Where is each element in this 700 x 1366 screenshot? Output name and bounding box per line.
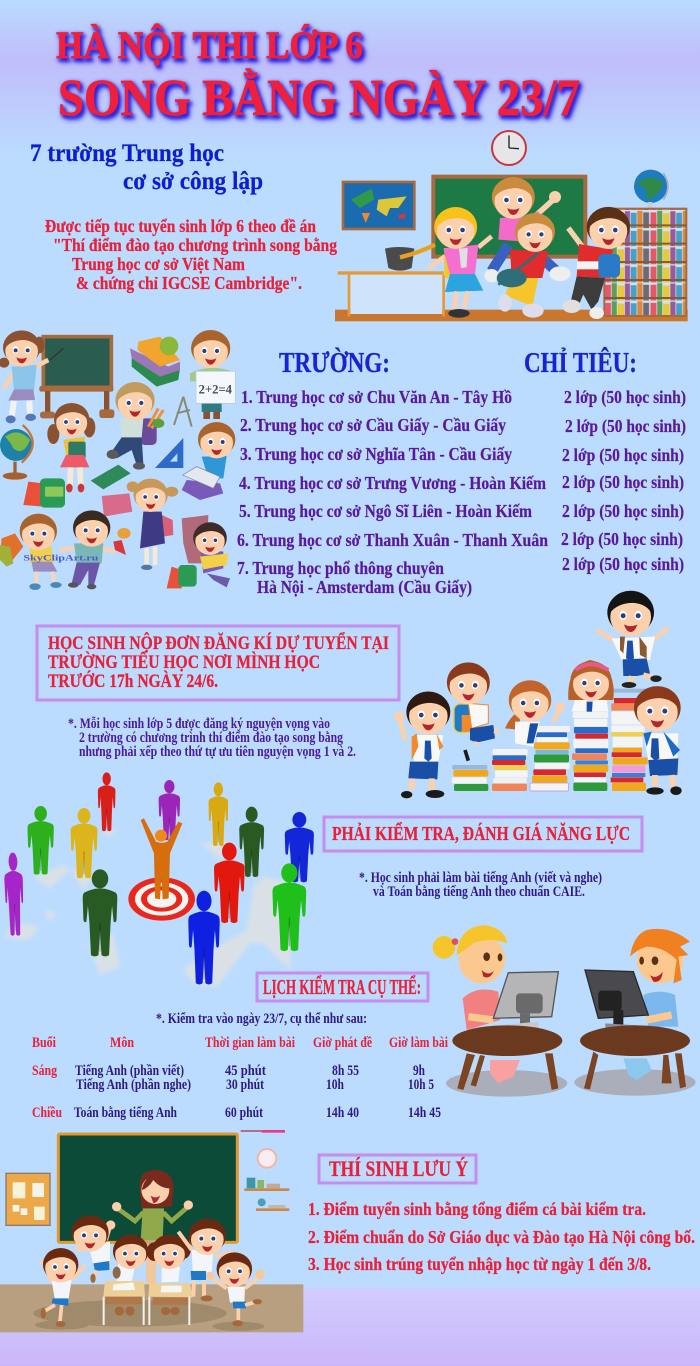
title — [56, 22, 580, 127]
list of schools: 4. Trung học cơ sở Trưng Vương - Hoàn Kiếm — [239, 473, 546, 493]
subtitle — [30, 140, 263, 195]
title: SONG BẰNG NGÀY 23/7 — [58, 67, 580, 127]
note: test subjects: và Toán bằng tiếng Anh theo chuẩn CAIE. — [373, 884, 585, 900]
illustration: classroom with four children — [335, 131, 688, 321]
set square — [155, 438, 183, 468]
globe — [0, 425, 33, 480]
callout: application deadline — [37, 626, 399, 700]
callout: application deadline: TRƯỜNG TIỂU HỌC NƠI MÌNH HỌC — [48, 651, 320, 673]
stack of books and apple — [130, 337, 180, 387]
figure: green left — [27, 806, 54, 875]
pupil: seated girl — [147, 1235, 191, 1282]
blackboard on stand — [39, 337, 114, 418]
wall shelves — [241, 1130, 289, 1211]
quota per school: 2 lớp (50 học sinh) — [565, 416, 686, 436]
title: HÀ NỘI THI LỚP 6 — [56, 22, 363, 67]
quota per school — [561, 387, 686, 574]
boy with math sign: 2+2=4 — [199, 382, 233, 396]
crayon box — [91, 465, 131, 489]
girl at computer — [433, 925, 558, 1083]
figure: yellow right — [209, 782, 228, 846]
wall clock — [258, 1149, 276, 1168]
jumping boy with backpack — [447, 662, 498, 761]
illustration: people standing around target — [3, 772, 314, 987]
subtitle: cơ sở công lập — [123, 168, 263, 195]
pupil desks — [103, 1281, 193, 1325]
list of schools — [237, 387, 548, 597]
round table right — [580, 1025, 690, 1089]
child: boy in front — [497, 213, 555, 318]
quota per school: 2 lớp (50 học sinh) — [564, 387, 686, 407]
child: blonde girl — [400, 207, 492, 318]
callout: application deadline: HỌC SINH NỘP ĐƠN ĐĂNG KÍ DỰ TUYỂN TẠI — [48, 632, 389, 654]
callout: application deadline: TRƯỚC 17h NGÀY 24/6. — [48, 670, 218, 692]
quota per school: 2 lớp (50 học sinh) — [562, 472, 684, 492]
girl with headband — [568, 660, 614, 712]
list of schools: 2. Trung học cơ sở Cầu Giấy - Cầu Giấy — [240, 415, 506, 435]
girl with pink strap — [505, 680, 565, 747]
illustration: two children at computers — [433, 925, 696, 1097]
intro text block: Trung học cơ sở Việt Nam — [72, 254, 245, 274]
round table left — [452, 1025, 562, 1090]
list of notes — [308, 1199, 695, 1274]
schedule table — [32, 1035, 448, 1121]
callout: must take assessment — [324, 817, 642, 851]
row: morning writing — [32, 1063, 425, 1079]
row: afternoon maths — [32, 1105, 441, 1121]
figure: red front — [214, 843, 245, 923]
quota per school: 2 lớp (50 học sinh) — [562, 445, 684, 465]
child: boy on top — [484, 177, 571, 282]
pupil: jumping left — [71, 1215, 115, 1283]
list of schools: 5. Trung học cơ sở Ngô Sĩ Liên - Hoàn Kiếm — [239, 501, 532, 521]
pupil: standing boy — [178, 1219, 233, 1301]
test date note: *. Kiểm tra vào ngày 23/7, cụ thể như sau: — [156, 1011, 367, 1027]
figure: red small — [98, 772, 115, 831]
figure: blue front — [188, 891, 220, 984]
boy at computer — [585, 929, 690, 1080]
teacher — [112, 1170, 193, 1284]
intro text block: Được tiếp tục tuyển sinh lớp 6 theo đề án — [45, 216, 316, 236]
quota per school: 2 lớp (50 học sinh) — [562, 501, 684, 521]
backpack — [23, 478, 65, 508]
callout: candidates note heading: THÍ SINH LƯU Ý — [329, 1156, 468, 1181]
illustration: collection of school children and supplies — [0, 330, 235, 590]
figure: purple rear — [159, 780, 180, 840]
watermark: SkyClipArt.ru — [23, 553, 99, 563]
chalkboard — [58, 1134, 237, 1242]
row: morning listening: Tiếng Anh (phần nghe) — [76, 1077, 191, 1093]
row: afternoon maths: 60 phút — [225, 1105, 263, 1121]
table header row: Buổi — [32, 1035, 56, 1051]
note: test subjects: *. Học sinh phải làm bài tiếng Anh (viết và nghe) — [359, 870, 602, 886]
row: morning listening — [76, 1077, 434, 1093]
girl with pink backpack — [127, 479, 178, 570]
row: morning writing: Tiếng Anh (phần viết) — [75, 1063, 184, 1079]
small backpack — [167, 565, 197, 588]
girl with pigtails — [47, 403, 95, 492]
figure: dark green right — [239, 807, 264, 877]
row: afternoon maths: 14h 45 — [408, 1105, 441, 1121]
notebook — [102, 493, 132, 517]
pupil: seated boy — [113, 1235, 148, 1282]
row: morning writing: 9h — [413, 1063, 425, 1079]
note: two preferences: nhưng phải xếp theo thứ tự ưu tiên nguyện vọng 1 và 2. — [79, 744, 356, 760]
note: two preferences: 2 trường có chương trình thí điểm đào tạo song bằng — [79, 730, 344, 746]
figure: yellow left — [71, 808, 97, 878]
boy with math sign — [190, 330, 235, 419]
child: curly-haired boy — [562, 207, 630, 319]
callout: schedule heading: LỊCH KIỂM TRA CỤ THỂ: — [263, 975, 421, 999]
list of notes: 3. Học sinh trúng tuyển nhập học từ ngày 1 đến 3/8. — [308, 1254, 651, 1274]
target — [128, 877, 195, 921]
table heading: quota: CHỈ TIÊU: — [524, 346, 637, 379]
list of notes: 1. Điểm tuyển sinh bằng tổng điểm cá bài kiểm tra. — [308, 1199, 646, 1219]
book stacks — [452, 689, 648, 791]
table header row — [32, 1035, 448, 1051]
row: morning listening: 10h — [326, 1077, 344, 1093]
note: two preferences — [68, 716, 356, 760]
row: morning listening: 10h 5 — [408, 1077, 434, 1093]
figure: blue right — [285, 812, 314, 882]
boy holding flowers — [60, 510, 131, 589]
smiling boy left — [394, 691, 450, 798]
subtitle: 7 trường Trung học — [30, 140, 224, 167]
row: morning writing: 45 phút — [225, 1063, 266, 1079]
figure: dark green front — [83, 869, 117, 956]
quota per school: 2 lớp (50 học sinh) — [561, 529, 683, 549]
list of schools: 1. Trung học cơ sở Chu Văn An - Tây Hồ — [241, 387, 512, 407]
girl with headband — [0, 514, 62, 590]
row: morning writing: 8h 55 — [332, 1063, 359, 1079]
illustration: children on stacks of books — [394, 591, 682, 798]
table header row: Thời gian làm bài — [205, 1035, 295, 1051]
list of schools: Hà Nội - Amsterdam (Cầu Giấy) — [257, 577, 472, 597]
cork board — [6, 1173, 50, 1225]
callout: schedule heading — [257, 973, 428, 1001]
pupil: far left — [41, 1248, 85, 1327]
intro text block: & chứng chỉ IGCSE Cambridge". — [76, 273, 302, 293]
row: afternoon maths: Chiều — [32, 1105, 62, 1121]
teacher girl — [0, 330, 63, 423]
boy on right — [634, 686, 682, 795]
row: morning writing: Sáng — [32, 1063, 58, 1079]
list of schools: 6. Trung học cơ sở Thanh Xuân - Thanh Xuân — [237, 530, 548, 550]
note: test subjects — [359, 870, 602, 900]
girl reading beside book stack — [182, 515, 230, 587]
figure: purple left — [3, 853, 25, 936]
row: afternoon maths: 14h 40 — [326, 1105, 359, 1121]
illustration: teacher and pupils in classroom — [0, 1130, 303, 1332]
table header row: Giờ phát đề — [313, 1035, 372, 1051]
intro text block: "Thí điểm đào tạo chương trình song bằng — [53, 235, 337, 255]
row: morning listening: 30 phút — [226, 1077, 264, 1093]
list of schools: 3. Trung học cơ sở Nghĩa Tân - Cầu Giấy — [240, 444, 512, 464]
boy reading — [182, 422, 235, 500]
list of schools: 7. Trung học phổ thông chuyên — [237, 558, 444, 578]
table header row: Giờ làm bài — [389, 1035, 448, 1051]
boy standing on top — [597, 591, 668, 688]
figure: green front right — [272, 863, 306, 951]
table header row: Môn — [110, 1035, 134, 1051]
boy walking with backpack — [107, 382, 164, 470]
quota per school: 2 lớp (50 học sinh) — [562, 554, 684, 574]
note: two preferences: *. Mỗi học sinh lớp 5 được đăng ký nguyện vọng vào — [68, 716, 330, 732]
compass — [174, 397, 192, 427]
pupil: jumping right — [206, 1252, 265, 1326]
row: afternoon maths: Toán bằng tiếng Anh — [74, 1105, 177, 1121]
intro text block — [45, 216, 337, 293]
table heading: school: TRƯỜNG: — [279, 346, 390, 379]
figure: orange in centre — [141, 818, 182, 899]
